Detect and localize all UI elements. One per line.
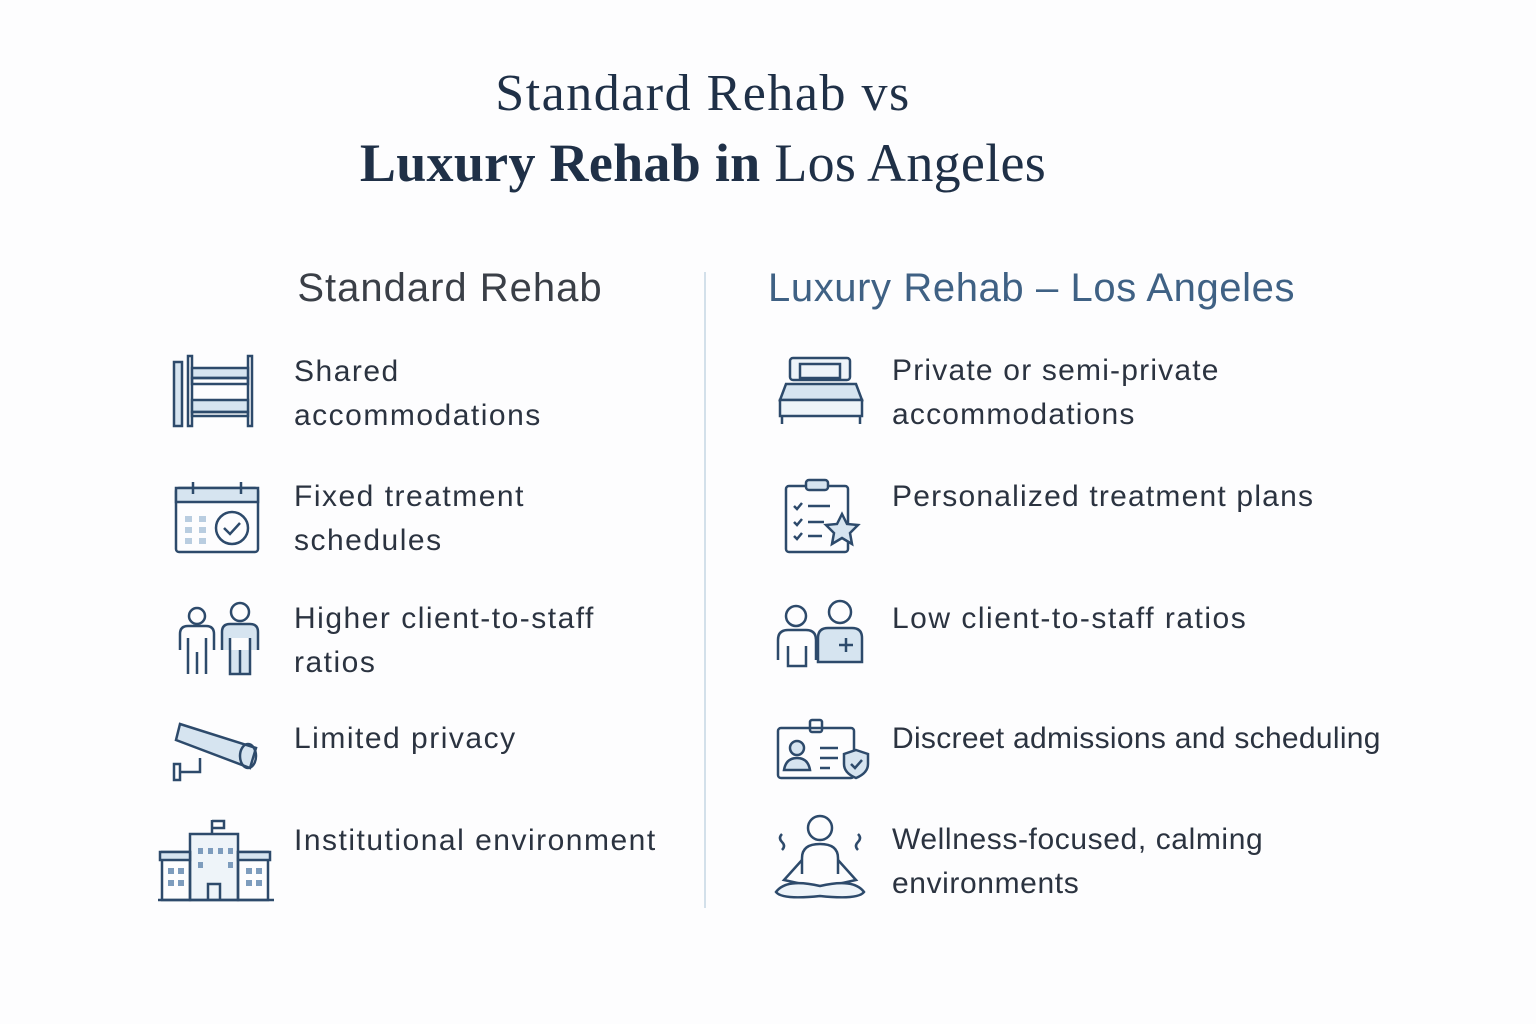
text: fixed treatment schedules: schedules — [294, 524, 443, 557]
panel: standard rehab items — [158, 354, 657, 902]
text: fixed treatment schedules: Fixed treatment — [294, 480, 525, 513]
text: institutional environment: Institutional environment — [294, 824, 657, 857]
text: higher ratios: Higher client-to-staff — [294, 602, 595, 635]
icon: institution building — [158, 820, 274, 902]
icon: security camera — [172, 722, 258, 782]
title: Standard Rehab vs — [495, 65, 911, 122]
icon: client and staff — [776, 600, 864, 668]
text: wellness environments — [892, 823, 1263, 900]
title: Luxury Rehab in Los Angeles — [360, 133, 1046, 193]
heading: luxury rehab: Luxury Rehab – Los Angeles — [768, 266, 1295, 310]
icon: people — [178, 602, 260, 676]
text: discreet admissions: Discreet admissions and scheduling — [892, 722, 1381, 755]
icon: bunk bed — [172, 354, 254, 428]
text: wellness environments: Wellness-focused, calming — [892, 823, 1263, 856]
text: private accommodations: Private or semi-private — [892, 354, 1220, 387]
text: shared accommodations — [294, 355, 542, 432]
icon: id card with shield — [776, 718, 870, 780]
text: higher ratios: ratios — [294, 646, 376, 679]
icon: bed — [778, 356, 864, 424]
divider — [704, 272, 706, 908]
heading: standard rehab: Standard Rehab — [297, 266, 603, 310]
icon: meditation — [774, 814, 866, 898]
text: low ratios: Low client-to-staff ratios — [892, 602, 1247, 635]
text: higher ratios — [294, 602, 595, 679]
icon: calendar — [174, 482, 260, 554]
text: shared accommodations: Shared — [294, 355, 400, 388]
text: fixed treatment schedules — [294, 480, 525, 557]
text: personalized plans: Personalized treatment plans — [892, 480, 1314, 513]
title — [360, 65, 1046, 193]
text: shared accommodations: accommodations — [294, 399, 542, 432]
icon: clipboard with star — [784, 478, 861, 554]
text: private accommodations: accommodations — [892, 398, 1136, 431]
text: private accommodations — [892, 354, 1220, 431]
text: limited privacy: Limited privacy — [294, 722, 517, 755]
text: wellness environments: environments — [892, 867, 1079, 900]
panel: luxury rehab items — [774, 354, 1381, 900]
